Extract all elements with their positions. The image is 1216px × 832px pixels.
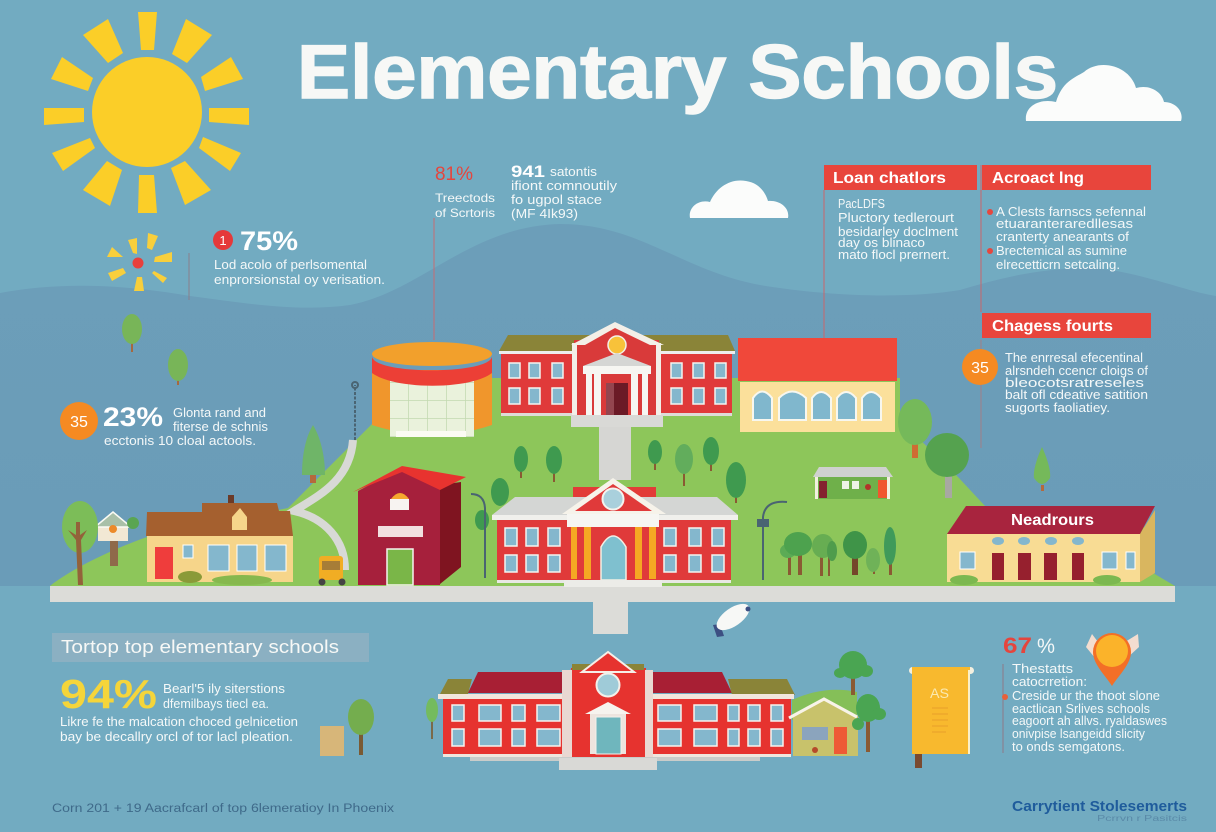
footer copyright: Carrytient Stolesemerts [1012,798,1187,815]
small centre building [813,467,893,499]
road stub [593,602,628,634]
panel: acroact lng: etuaranteraredllesas [996,217,1133,231]
stat block 23%: 35 [70,414,88,431]
stat block 94% [60,671,298,744]
central school windows [505,528,724,572]
road [50,586,1175,602]
rocket [712,599,754,637]
stat block 67%: % [1037,635,1055,658]
footer source: Corn 201 + 19 Aacrafcarl of top 6lemeratioy In Phoenix [52,803,394,815]
burgundy school [353,466,466,585]
title: Elementary Schools [297,30,1058,115]
small sun icon [107,233,172,291]
panel: chagess fourts: sugorts faoliatiey. [1005,401,1110,415]
panel: acroact lng: elrecetticrn setcaling. [996,258,1120,272]
stat block 67%: 67 [1003,633,1032,658]
panel: chagess fourts [962,313,1151,448]
cloud top right [1026,65,1182,121]
panel: loan chatlors: day os blinaco [838,236,925,250]
stat block 94%: 94% [60,671,157,717]
stat block 81%: of Scrtoris [435,206,495,220]
stat block 23%: 23% [103,402,163,432]
bottom school [438,652,795,770]
top main school [499,322,735,427]
small treehouse [95,512,139,566]
stat block 67%: onivpise lsangeidd slicity [1012,727,1146,741]
brown roof house [146,495,293,585]
tree cluster [780,527,896,576]
panel: loan chatlors [824,165,977,338]
stat block 75%: 1 [219,233,227,248]
stat block 81%: Treectods [435,191,495,205]
stat block 941: (MF 4Ik93) [511,207,578,221]
panel: loan chatlors: PacLDFS [838,197,885,211]
sun [44,12,249,213]
panel: acroact lng: Brectemical as sumine [996,244,1127,258]
panel: loan chatlors: Loan chatlors [833,170,946,187]
panel: acroact lng: cranterty anearants of [996,230,1130,244]
neadrours school [947,506,1155,585]
panel: loan chatlors: Pluctory tedlerourt [838,211,955,225]
stat block 75%: 75% [240,226,298,256]
round building [372,342,492,437]
stat block 67%: catocrretion: [1012,675,1087,689]
stat block 23% [60,402,268,448]
stat block 23%: ecctonis 10 cloal actools. [104,434,256,448]
stat block 23%: fiterse de schnis [173,420,268,434]
cloud small [690,180,788,218]
stat block 94%: Likre fe the malcation choced gelnicetion [60,715,298,729]
panel: acroact lng [981,165,1151,312]
stat block 94%: Bearl'5 ily siterstions [163,682,285,696]
panel: loan chatlors: besidarley doclment [838,225,959,239]
icon: map pin with wings [1086,633,1139,686]
conifer trees [475,437,746,530]
heading: top elementary schools [52,633,369,662]
stat block 94%: dfemilbays tiecl ea. [163,697,269,711]
stat block 67%: Creside ur the thoot slone [1012,689,1160,703]
stat block 67%: eagoort ah allvs. ryaldaswes [1012,714,1167,728]
school bus [318,556,346,586]
stat block 75%: Lod acolo of perlsomental [214,258,367,272]
central school [492,478,738,587]
stat block 81% [434,164,495,340]
bottom school windows [452,705,783,746]
panel: chagess fourts: Chagess fourts [992,318,1113,335]
bottom small house [789,690,858,756]
trees [62,314,1050,585]
stat block 941: satontis [550,165,597,179]
yellow school [738,338,897,432]
heading: top elementary schools: Tortop top elementary schools [61,636,339,657]
footer copyright [1012,798,1187,823]
icon: yellow book [909,667,974,768]
icon: boxes and tree [320,699,374,756]
stat block 23%: Glonta rand and [173,406,266,420]
panel: acroact lng: Acroact lng [992,170,1084,187]
panel: acroact lng: A Clests farnscs sefennal [996,205,1146,219]
panel: chagess fourts: The enrresal efecentinal [1005,351,1143,365]
stat block 67%: Thestatts [1012,662,1073,676]
stat block 67%: to onds semgatons. [1012,740,1125,754]
stat block 81%: 81% [435,164,473,185]
top school windows [509,363,726,404]
curved path [294,440,353,570]
icon: yellow book: AS [930,685,949,701]
panel: chagess fourts: alrsndeh ccencr cloigs of [1005,364,1149,378]
footer copyright: Pcrrvn r Pasitcis [1097,814,1187,823]
green campus land [50,378,1175,586]
bottom trees [426,651,886,752]
stat block 941: 941 [511,162,545,181]
background hills [0,224,1216,586]
stat block 941 [511,162,618,221]
lamp posts [352,382,787,580]
stat block 75%: enprorsionstal oy verisation. [214,273,385,287]
central walkway [599,427,631,480]
stat block 75% [189,226,385,300]
neadrours school: Neadrours [1011,512,1094,529]
panel: chagess fourts: balt ofl cdeative satition [1005,388,1148,402]
stat block 94%: bay be decallry orcl of tor lacl pleation. [60,730,293,744]
panel: chagess fourts: bleocotsratreseles [1005,376,1144,390]
panel: chagess fourts: 35 [971,360,989,377]
stat block 67%: eactlican Srlives schools [1012,702,1150,716]
stat block 941: fo ugpol stace [511,193,602,207]
panel: loan chatlors: mato flocl prernert. [838,248,950,262]
stat block 941: ifiont comnoutily [511,179,618,193]
stat block 67% [1002,633,1167,754]
